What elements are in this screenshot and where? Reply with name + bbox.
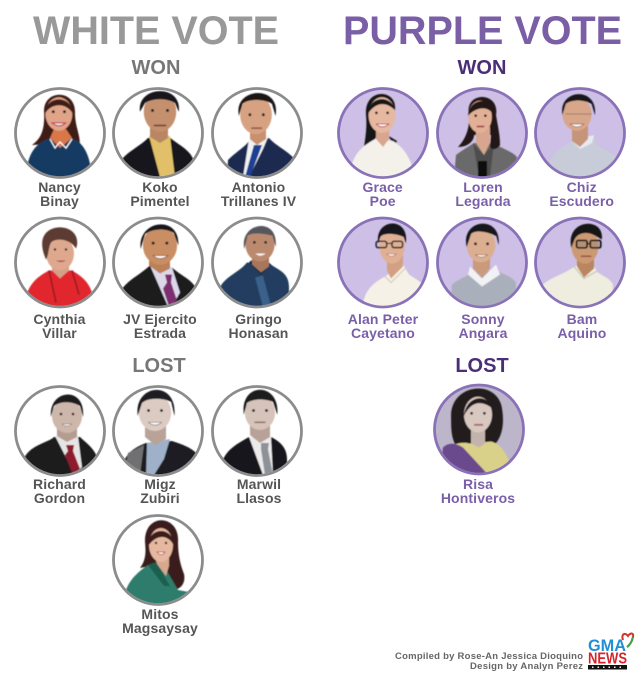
portrait: Mitos Magsaysay [114, 516, 202, 604]
heading: white vote lost: LOST [132, 355, 186, 377]
heading: purple vote lost: LOST [455, 355, 509, 377]
name: Koko Pimentel: Pimentel [130, 193, 190, 209]
portrait: Bam Aquino [536, 218, 624, 307]
name: Antonio Trillanes IV: Trillanes IV [221, 193, 297, 209]
candidate: Sonny Angara [438, 218, 526, 341]
name: Gringo Honasan: Honasan [229, 325, 288, 341]
name: Richard Gordon: Gordon [34, 490, 85, 506]
portrait: Nancy Binay [16, 88, 104, 178]
name: Marwil Llasos: Llasos [236, 490, 282, 506]
name: Antonio Trillanes IV: Antonio [232, 179, 285, 195]
name: Sonny Angara: Angara [459, 325, 508, 341]
candidate: Chiz Escudero [536, 88, 624, 209]
name: Grace Poe: Poe [370, 193, 396, 209]
name: Cynthia Villar: Cynthia [33, 311, 86, 327]
logo: GMA News [588, 634, 633, 670]
name: Loren Legarda: Legarda [455, 193, 511, 209]
candidate: Koko Pimentel [114, 88, 202, 209]
name: Alan Peter Cayetano: Alan Peter [348, 311, 418, 327]
name: Bam Aquino: Bam [567, 311, 597, 327]
name: Chiz Escudero: Escudero [549, 193, 614, 209]
name: Nancy Binay: Binay [40, 193, 79, 209]
candidate: Bam Aquino [536, 218, 624, 341]
portrait: Koko Pimentel [114, 88, 202, 178]
candidate: Migz Zubiri [114, 386, 202, 506]
name: Migz Zubiri: Zubiri [140, 490, 180, 506]
name: Mitos Magsaysay: Magsaysay [122, 620, 198, 636]
candidate: Alan Peter Cayetano [338, 218, 428, 341]
name: Marwil Llasos: Marwil [237, 476, 281, 492]
candidate: Marwil Llasos [212, 386, 302, 506]
candidate: Loren Legarda [438, 88, 526, 209]
candidate: Gringo Honasan [212, 218, 302, 341]
logo: GMA News: GMA [588, 636, 626, 655]
name: Risa Hontiveros: Hontiveros [441, 490, 515, 506]
name: Gringo Honasan: Gringo [235, 311, 282, 327]
candidate: Nancy Binay [16, 88, 104, 209]
name: Sonny Angara: Sonny [461, 311, 505, 327]
name: Grace Poe: Grace [363, 179, 403, 195]
portrait: Loren Legarda [438, 88, 526, 178]
name: Loren Legarda: Loren [463, 179, 503, 195]
candidate: Mitos Magsaysay [114, 516, 202, 636]
name: Cynthia Villar: Villar [42, 325, 77, 341]
candidate: Cynthia Villar [16, 218, 104, 341]
portrait: Cynthia Villar [16, 218, 104, 307]
name: Migz Zubiri: Migz [144, 476, 176, 492]
title: purple vote: PURPLE VOTE [343, 9, 622, 53]
name: JV Ejercito Estrada: JV Ejercito [123, 311, 197, 327]
name: Risa Hontiveros: Risa [463, 476, 493, 492]
name: Mitos Magsaysay: Mitos [141, 606, 179, 622]
logo: GMA News: NEWS [588, 650, 627, 668]
portrait: Chiz Escudero [536, 88, 624, 178]
portrait: Gringo Honasan [212, 218, 302, 307]
portrait: Migz Zubiri [114, 386, 202, 476]
title: white vote: WHITE VOTE [33, 9, 279, 53]
portrait: Alan Peter Cayetano [338, 218, 428, 307]
portrait: Antonio Trillanes IV [212, 88, 302, 178]
candidate: JV Ejercito Estrada [114, 218, 202, 341]
heading: purple vote won: WON [458, 57, 506, 79]
candidate: Antonio Trillanes IV [212, 88, 302, 209]
credits [395, 651, 583, 672]
candidate: Grace Poe [338, 88, 428, 209]
name: Richard Gordon: Richard [33, 476, 86, 492]
portrait: Sonny Angara [438, 218, 526, 307]
name: Alan Peter Cayetano: Cayetano [351, 325, 415, 341]
name: Koko Pimentel: Koko [142, 179, 178, 195]
name: Nancy Binay: Nancy [38, 179, 81, 195]
name: JV Ejercito Estrada: Estrada [134, 325, 186, 341]
name: Bam Aquino: Aquino [558, 325, 606, 341]
name: Chiz Escudero: Chiz [567, 179, 597, 195]
portrait: Richard Gordon [16, 386, 104, 476]
portrait: Marwil Llasos [212, 386, 302, 476]
portrait: Risa Hontiveros [434, 385, 524, 474]
credits: Compiled by Rose-An Jessica Dioquino [395, 651, 583, 662]
credits: Design by Analyn Perez [470, 661, 583, 672]
candidate: Risa Hontiveros [434, 385, 524, 506]
candidate: Richard Gordon [16, 386, 104, 506]
portrait: JV Ejercito Estrada [114, 218, 202, 307]
heading: white vote won: WON [132, 57, 180, 79]
portrait: Grace Poe [338, 88, 428, 178]
